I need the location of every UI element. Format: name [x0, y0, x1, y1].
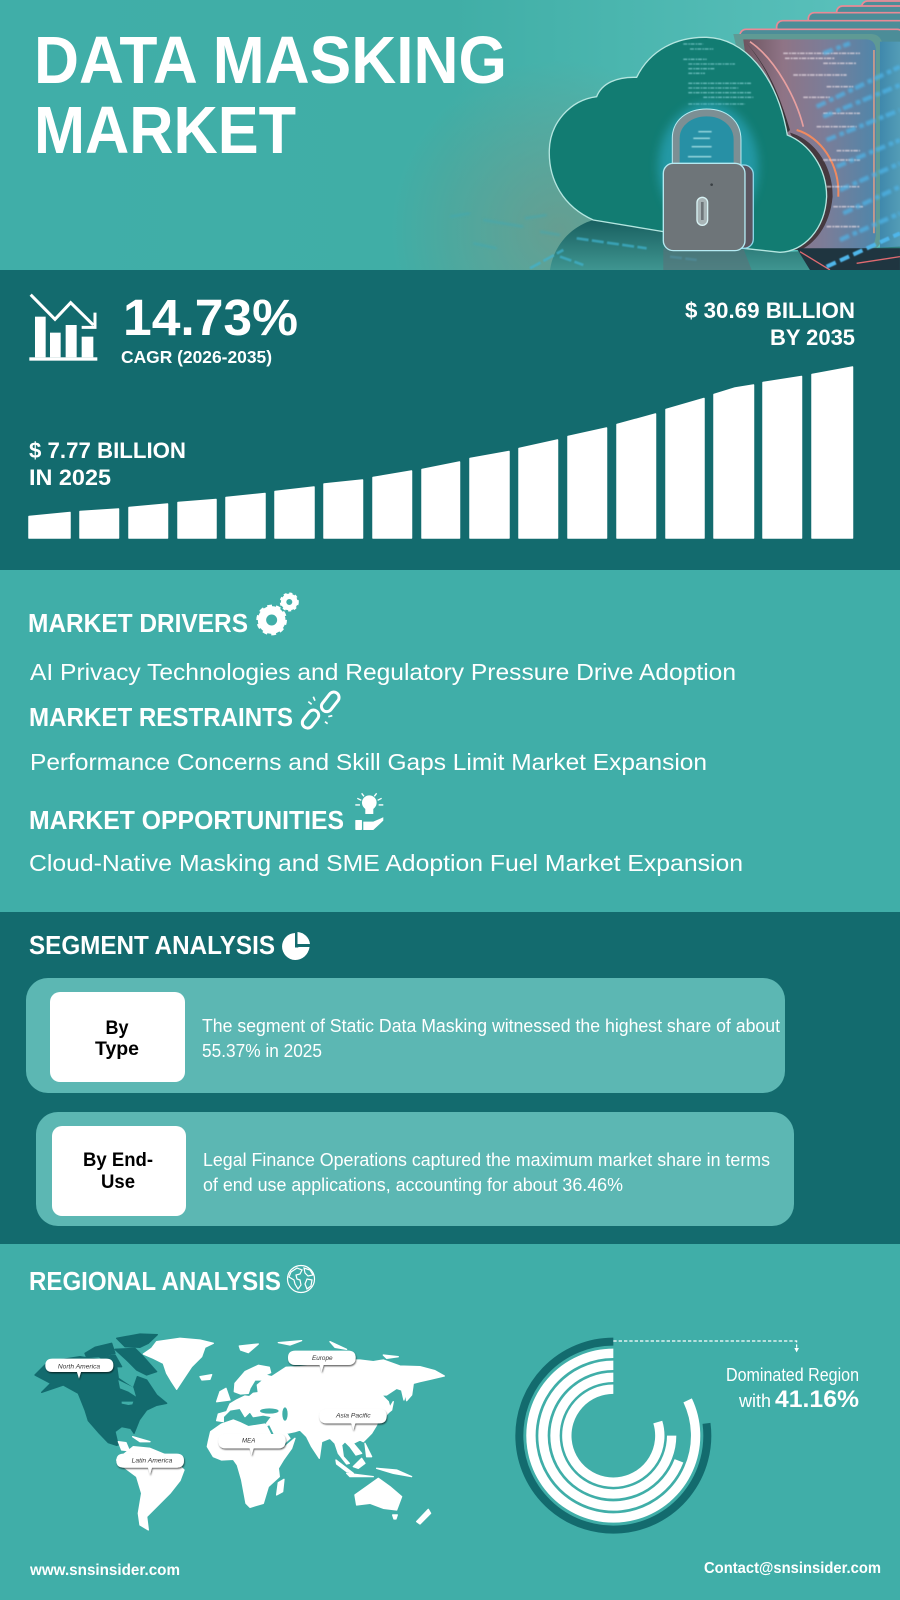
footer: website: www.snsinsider.com [29, 1562, 180, 1579]
2035 value: BY 2035 [770, 325, 855, 350]
label: mea [218, 1434, 286, 1455]
heading: market opportunities: MARKET OPPORTUNITIES [29, 807, 344, 835]
label: north america: North America [58, 1363, 100, 1370]
icon: broken chain [300, 690, 341, 730]
title: DATA MASKING [34, 23, 507, 98]
code lines on the cloud [683, 44, 753, 104]
title: MARKET [34, 93, 296, 168]
label: europe [288, 1351, 356, 1372]
label: north america [45, 1359, 113, 1379]
panel: regional analysis [0, 1244, 900, 1600]
hudson bay [118, 1380, 136, 1405]
hero image: cloud and padlock [450, 1, 900, 270]
title [34, 23, 507, 168]
server panels behind the cloud [733, 1, 900, 255]
label: asia pacific [319, 1409, 387, 1430]
cloud [549, 37, 827, 252]
card: by type: Type [95, 1039, 139, 1060]
footer: contact: Contact@snsinsider.com [704, 1560, 881, 1577]
callout: dominated region: 41.16% [775, 1386, 859, 1413]
label: latin america [116, 1454, 184, 1475]
radial bar chart [519, 1341, 799, 1530]
callout: dominated region [726, 1365, 859, 1413]
heading: segment analysis: SEGMENT ANALYSIS [29, 932, 275, 960]
heading: regional analysis: REGIONAL ANALYSIS [29, 1268, 281, 1296]
2025 value: IN 2025 [29, 465, 111, 490]
label: latin america: Latin America [132, 1457, 173, 1464]
text: opportunities: Cloud-Native Masking and SME Adoption Fuel Market Expansion [29, 850, 743, 876]
padlock [658, 103, 758, 251]
card: by end-use: Use [101, 1172, 135, 1193]
card: by end-use: of end use applications, accounting for about 36.46% [203, 1175, 623, 1195]
panel: market dynamics [0, 570, 900, 912]
world map [35, 1334, 444, 1530]
panel: segment analysis [0, 912, 900, 1244]
label: asia pacific: Asia Pacific [335, 1412, 371, 1419]
panel: market size [0, 270, 900, 570]
seas [260, 1407, 288, 1446]
CAGR value: 14.73% [123, 289, 298, 346]
callout: dominated region: with [738, 1391, 771, 1411]
card: by end-use [36, 1112, 794, 1226]
icon: gears [258, 594, 298, 634]
callout: dominated region: Dominated Region [726, 1365, 859, 1385]
label: europe: Europe [312, 1355, 333, 1362]
2025 value [29, 438, 186, 490]
bar chart [29, 367, 852, 538]
2025 value: $ 7.77 BILLION [29, 438, 186, 463]
icon: idea in hand [355, 793, 383, 830]
card: by end-use: Legal Finance Operations captured the maximum market share in terms [203, 1150, 770, 1170]
card: by type [26, 978, 785, 1093]
text: restraints: Performance Concerns and Skill Gaps Limit Market Expansion [30, 749, 707, 775]
arrow: dashed leader [613, 1341, 799, 1352]
2035 value: $ 30.69 BILLION [685, 298, 855, 323]
card: by end-use: By End- [83, 1150, 153, 1171]
icon: globe [288, 1266, 314, 1292]
label: mea: MEA [242, 1438, 256, 1445]
heading: market restraints: MARKET RESTRAINTS [29, 704, 293, 732]
2035 value [685, 298, 855, 350]
CAGR label: CAGR (2026-2035) [121, 347, 272, 367]
region: north america highlighted [35, 1334, 167, 1445]
icon: bar chart with falling arrow [29, 295, 97, 361]
card: by type: By [106, 1018, 129, 1039]
heading: market drivers: MARKET DRIVERS [28, 610, 248, 638]
text: drivers: AI Privacy Technologies and Regulatory Pressure Drive Adoption [30, 659, 736, 685]
card: by type: The segment of Static Data Masking witnessed the highest share of about [202, 1016, 780, 1036]
card: by type: 55.37% in 2025 [202, 1041, 322, 1061]
icon: pie chart [282, 932, 310, 960]
hero background [0, 0, 900, 270]
floor reflection [450, 213, 900, 270]
land: rest of world [117, 1338, 444, 1530]
